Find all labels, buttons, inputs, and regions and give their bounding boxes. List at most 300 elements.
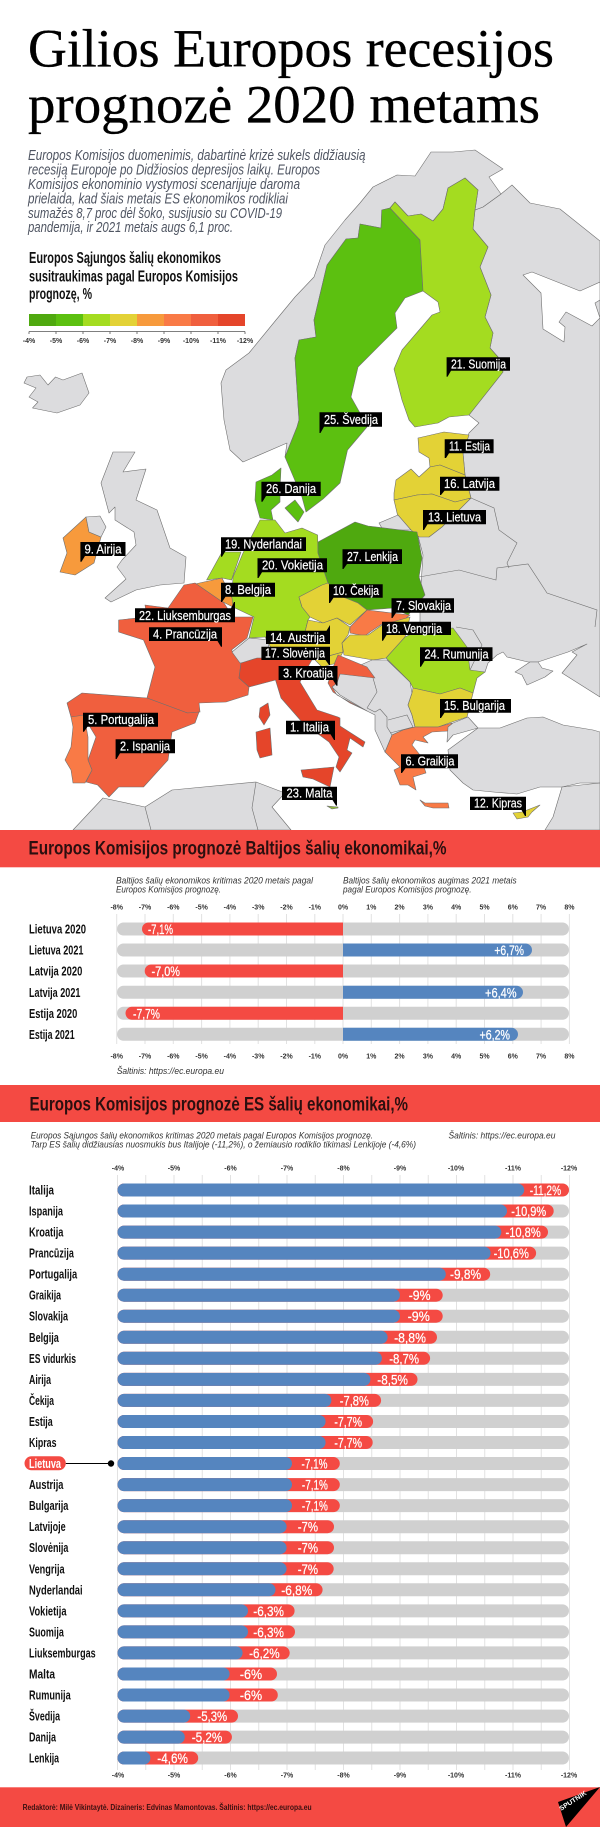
label: Slovenija bbox=[261, 646, 330, 665]
baltic bar chart: 3% bbox=[423, 1054, 434, 1060]
northern ireland bbox=[86, 516, 106, 537]
row: Rumunija: -6% bbox=[240, 1687, 262, 1703]
corsica bbox=[259, 703, 270, 725]
row: Latvija 2020: -7,0% bbox=[152, 963, 180, 979]
netherlands bbox=[207, 552, 241, 580]
row: Italija: Italija bbox=[29, 1182, 55, 1198]
EU chart notes: Šaltinis: https://ec.europa.eu bbox=[448, 1130, 556, 1141]
row: Bulgarija: Bulgarija bbox=[29, 1498, 69, 1513]
baltic bar chart: 2% bbox=[395, 904, 405, 912]
label: Kipras: 12. Kipras bbox=[474, 796, 522, 810]
row: Ispanija: -10,9% bbox=[511, 1203, 546, 1219]
label: Belgija bbox=[221, 583, 275, 602]
iceland bbox=[24, 373, 89, 413]
label: Austrija bbox=[266, 625, 330, 645]
row: Austrija bbox=[29, 1477, 569, 1493]
label: Estija bbox=[445, 439, 494, 458]
croatia bbox=[328, 655, 375, 711]
EU bar chart: -11% bbox=[505, 1772, 522, 1780]
header band: EU forecast: Europos Komisijos prognozė ES šalių ekonomikai,% bbox=[30, 1095, 408, 1116]
row: Suomija: -6,3% bbox=[253, 1624, 284, 1640]
row: Airija: -8,5% bbox=[377, 1371, 408, 1387]
colour legend: -7% bbox=[104, 338, 117, 345]
row: Kroatija bbox=[29, 1224, 569, 1240]
row: Svedija: Švedija bbox=[29, 1709, 61, 1724]
colour legend: -10% bbox=[183, 338, 200, 345]
baltic bar chart: -4% bbox=[224, 904, 237, 912]
title: Gilios Europos recesijos bbox=[28, 19, 554, 79]
row: Lietuva highlighted: Lietuva bbox=[29, 1456, 62, 1471]
balkan border lines bbox=[367, 678, 413, 735]
icon: sputnik logo: SPUTNIK bbox=[558, 1790, 588, 1813]
lithuania bbox=[394, 494, 471, 537]
label: Slovakija: 7. Slovakija bbox=[396, 599, 451, 613]
intro text bbox=[27, 147, 366, 236]
EU bar chart: -11% bbox=[505, 1166, 522, 1172]
baltic bar chart: 8% bbox=[564, 1054, 575, 1060]
row: ES vidurkis: ES vidurkis bbox=[29, 1351, 76, 1366]
row: Malta: Malta bbox=[29, 1666, 56, 1682]
label: Portugalija: 5. Portugalija bbox=[88, 713, 154, 727]
balkans bbox=[332, 660, 415, 752]
baltic bar chart: -2% bbox=[280, 904, 293, 912]
ireland bbox=[60, 517, 101, 575]
EU chart notes bbox=[31, 1130, 556, 1151]
baltic bar chart bbox=[29, 904, 575, 1060]
row: Slovenija: Slovėnija bbox=[29, 1540, 69, 1555]
row: Lietuva 2021 bbox=[29, 942, 569, 958]
EU bar chart: -4% bbox=[112, 1166, 125, 1172]
france bbox=[119, 583, 253, 713]
baltic chart notes: Baltijos šalių ekonomikos augimas 2021 metais bbox=[343, 876, 517, 886]
row: Lietuva 2021: +6,7% bbox=[494, 942, 524, 958]
label: Airija: 9. Airija bbox=[84, 542, 122, 556]
row: Portugalija: Portugalija bbox=[29, 1267, 78, 1282]
row: Estija 2021: Estija 2021 bbox=[29, 1027, 75, 1042]
label: Portugalija bbox=[83, 713, 158, 732]
white sea bbox=[523, 272, 600, 342]
crete bbox=[420, 800, 449, 808]
label: Danija bbox=[261, 482, 321, 502]
title bbox=[28, 19, 554, 135]
row: Slovenija bbox=[29, 1540, 569, 1556]
EU chart notes: Tarp ES šalių didžiausias nuosmukis bus Italijoje (-11,2%), o žemiausio rodiklio tikimasi Lenkijoje (-4,6%) bbox=[31, 1140, 416, 1151]
row: Vengrija bbox=[29, 1561, 569, 1577]
estonia bbox=[418, 432, 469, 475]
intro text: sumažės 8,7 proc dėl šoko, susijusio su COVID-19 bbox=[28, 205, 282, 222]
baltic bar chart: 5% bbox=[479, 904, 490, 912]
zealand bbox=[285, 500, 304, 522]
germany bbox=[232, 520, 328, 638]
colour legend: -6% bbox=[77, 338, 90, 345]
cyprus bbox=[513, 805, 540, 819]
row: Kipras: Kipras bbox=[29, 1435, 56, 1450]
label: Slovakija bbox=[392, 598, 454, 618]
row: Lietuva highlighted: -7,1% bbox=[302, 1456, 328, 1472]
label: Svedija bbox=[320, 412, 382, 433]
label: Kipras bbox=[470, 796, 526, 816]
EU bar chart: -8% bbox=[337, 1166, 350, 1172]
label: Lenkija: 27. Lenkija bbox=[347, 550, 398, 564]
row: Lietuva 2020: -7,1% bbox=[148, 921, 173, 937]
row: Lenkija: Lenkija bbox=[29, 1750, 60, 1766]
intro text: pandemija, ir 2021 metais augs 6,1 proc. bbox=[27, 219, 233, 236]
switzerland bbox=[232, 638, 270, 663]
row: Prancuzija: -10,6% bbox=[494, 1245, 529, 1261]
legend heading: Europos Sąjungos šalių ekonomikos bbox=[29, 250, 221, 267]
portugal bbox=[65, 715, 92, 783]
baltic chart notes: Europos Komisijos prognozę. bbox=[116, 885, 221, 896]
row: Estija 2020 bbox=[29, 1005, 569, 1021]
row: Estija 2020: -7,7% bbox=[133, 1005, 160, 1021]
title: prognozė 2020 metams bbox=[28, 75, 540, 135]
row: Graikija: Graikija bbox=[29, 1288, 62, 1303]
baltic bar chart: 0% bbox=[338, 904, 349, 912]
label: Graikija: 6. Graikija bbox=[406, 754, 455, 768]
row: Graikija bbox=[29, 1287, 569, 1303]
colour legend: -12% bbox=[237, 338, 254, 345]
finland bbox=[390, 178, 503, 427]
row: Estija: Estija bbox=[29, 1414, 53, 1429]
label: Prancuzija bbox=[149, 627, 222, 647]
label: Kroatija: 3. Kroatija bbox=[283, 666, 333, 680]
sardinia bbox=[256, 728, 272, 758]
row: Latvija 2021: Latvija 2021 bbox=[29, 985, 80, 1000]
map labels bbox=[80, 357, 526, 816]
label: Italija bbox=[286, 720, 335, 740]
baltic bar chart: -2% bbox=[280, 1054, 293, 1060]
label: Vokietija: 20. Vokietija bbox=[262, 558, 323, 572]
header band: Baltic forecast bbox=[0, 830, 600, 867]
baltic bar chart: -8% bbox=[110, 904, 124, 912]
baltic bar chart: 2% bbox=[395, 1054, 405, 1060]
baltic bar chart: 1% bbox=[366, 904, 377, 912]
baltic chart notes: Baltijos šalių ekonomikos kritimas 2020 metais pagal bbox=[116, 876, 314, 886]
intro text: prielaida, kad šiais metais ES ekonomikos rodikliai bbox=[27, 190, 289, 208]
row: Bulgarija: -7,1% bbox=[302, 1498, 328, 1514]
colour legend: -9% bbox=[158, 338, 171, 345]
label: Ispanija bbox=[116, 739, 175, 759]
label: Liuksemburgas: 22. Liuksemburgas bbox=[139, 609, 231, 623]
row: Lietuva highlighted bbox=[24, 1456, 569, 1472]
label: Kroatija bbox=[279, 666, 338, 686]
row: Latvija 2020: Latvija 2020 bbox=[29, 964, 82, 978]
row: Cekija: -7,8% bbox=[340, 1392, 369, 1408]
baltic bar chart: -7% bbox=[139, 904, 152, 912]
baltic bar chart: -5% bbox=[195, 1054, 209, 1060]
row: ES vidurkis bbox=[29, 1350, 569, 1366]
map of Europe bbox=[24, 150, 600, 830]
row: Estija: -7,7% bbox=[334, 1414, 362, 1430]
row: Latvija 2020 bbox=[29, 963, 569, 979]
greece bbox=[385, 723, 452, 790]
row: Kipras: -7,7% bbox=[334, 1434, 362, 1450]
row: Slovakija: -9% bbox=[408, 1308, 430, 1324]
legend heading: prognozę, % bbox=[29, 286, 92, 303]
hungary bbox=[342, 617, 410, 660]
row: Estija bbox=[29, 1414, 569, 1430]
footer band: Redaktorė: Milė Vikintaytė. Dizaineris: Edvinas Mamontovas. Šaltinis: https://ec.europa.eu bbox=[23, 1803, 312, 1812]
row: Prancuzija bbox=[29, 1245, 569, 1261]
row: Lenkija bbox=[29, 1750, 569, 1766]
label: Suomija: 21. Suomija bbox=[451, 358, 506, 372]
colour legend bbox=[23, 314, 254, 345]
EU bar chart: -7% bbox=[281, 1772, 294, 1780]
baltic bar chart: -8% bbox=[110, 1054, 124, 1060]
label: Ispanija: 2. Ispanija bbox=[120, 740, 170, 754]
row: Estija 2021 bbox=[29, 1026, 569, 1042]
row: Latvija 2021: +6,4% bbox=[485, 984, 517, 1000]
row: Lietuva 2020: Lietuva 2020 bbox=[29, 922, 86, 936]
row: Vokietija: -6,3% bbox=[253, 1603, 284, 1619]
eastern border lines bbox=[419, 498, 597, 670]
row: Danija: -5,2% bbox=[192, 1729, 222, 1745]
row: Prancuzija: Prancūzija bbox=[29, 1246, 74, 1261]
row: Latvijoje: Latvijoje bbox=[29, 1519, 66, 1534]
row: Danija bbox=[29, 1729, 569, 1745]
row: Suomija: Suomija bbox=[29, 1624, 64, 1639]
EU chart notes: Europos Sąjungos šalių ekonomikos kritimas 2020 metais pagal Europos Komisijos prognozę. bbox=[31, 1130, 373, 1141]
row: Slovenija: -7% bbox=[298, 1540, 318, 1556]
label: Rumunija: 24. Rumunija bbox=[424, 648, 489, 662]
label: Graikija bbox=[401, 754, 458, 773]
row: Slovakija bbox=[29, 1308, 569, 1324]
label: Suomija bbox=[447, 357, 510, 377]
row: Nyderlandai: Nyderlandai bbox=[29, 1582, 83, 1597]
sicily bbox=[301, 767, 334, 787]
baltic bar chart: 7% bbox=[536, 904, 547, 912]
baltic bar chart: -6% bbox=[167, 1054, 180, 1060]
row: Belgija: Belgija bbox=[29, 1330, 59, 1345]
row: Italija bbox=[29, 1182, 569, 1198]
slovenia bbox=[315, 652, 343, 667]
legend heading: susitraukimas pagal Europos Komisijos bbox=[29, 268, 238, 286]
row: ES vidurkis: -8,7% bbox=[389, 1350, 419, 1366]
united kingdom bbox=[101, 452, 186, 602]
norway bbox=[221, 150, 503, 462]
baltic bar chart: 0% bbox=[338, 1054, 349, 1060]
EU bar chart: -5% bbox=[168, 1772, 181, 1780]
turkey bbox=[448, 717, 600, 794]
row: Airija: Airija bbox=[29, 1372, 52, 1387]
row: Lietuva 2020 bbox=[29, 921, 569, 937]
EU bar chart: -6% bbox=[224, 1166, 237, 1172]
label: Lietuva bbox=[423, 510, 486, 530]
legend heading bbox=[29, 250, 238, 303]
baltic bar chart: 7% bbox=[536, 1054, 547, 1060]
baltic bar chart: -1% bbox=[309, 904, 322, 912]
row: Kroatija: Kroatija bbox=[29, 1225, 64, 1240]
colour legend: -8% bbox=[131, 338, 144, 345]
czechia bbox=[299, 583, 367, 625]
icon: sputnik logo bbox=[558, 1787, 600, 1827]
header band: Baltic forecast: Europos Komisijos prognozė Baltijos šalių ekonomikai,% bbox=[28, 838, 447, 859]
label: Svedija: 25. Švedija bbox=[324, 412, 378, 427]
EU bar chart bbox=[24, 1166, 578, 1780]
sweden bbox=[285, 208, 423, 512]
row: Kroatija: -10,8% bbox=[506, 1224, 541, 1240]
row: Estija 2021: +6,2% bbox=[480, 1026, 510, 1042]
baltic bar chart: 6% bbox=[508, 904, 519, 912]
baltic bar chart: -3% bbox=[252, 904, 265, 912]
denmark bbox=[255, 468, 281, 520]
row: Lietuva 2021: Lietuva 2021 bbox=[29, 942, 83, 958]
row: Liuksemburgas: -6,2% bbox=[249, 1645, 280, 1661]
row: Cekija: Čekija bbox=[29, 1393, 54, 1408]
baltic bar chart: 1% bbox=[366, 1054, 377, 1060]
EU bar chart: -4% bbox=[112, 1772, 125, 1780]
row: Belgija bbox=[29, 1329, 569, 1345]
baltic chart source: Šaltinis: https://ec.europa.eu bbox=[117, 1066, 225, 1077]
kaliningrad bbox=[379, 515, 411, 530]
label: Rumunija bbox=[420, 647, 492, 667]
intro text: Komisijos ekonominio vystymosi scenarijuje daroma bbox=[28, 176, 300, 193]
EU bar chart: -12% bbox=[561, 1772, 578, 1780]
label: Vokietija bbox=[258, 558, 327, 578]
row: Rumunija bbox=[29, 1687, 569, 1703]
romania bbox=[386, 628, 485, 694]
baltic bar chart: -1% bbox=[309, 1054, 322, 1060]
row: Estija 2020: Estija 2020 bbox=[29, 1006, 77, 1021]
slovakia bbox=[350, 610, 410, 636]
row: Vengrija: Vengrija bbox=[29, 1561, 65, 1576]
baltic bar chart: 6% bbox=[508, 1054, 519, 1060]
row: Kipras bbox=[29, 1434, 569, 1450]
label: Slovenija: 17. Slovėnija bbox=[265, 646, 325, 660]
baltic bar chart: 3% bbox=[423, 904, 434, 912]
label: Airija bbox=[80, 542, 126, 562]
bulgaria bbox=[408, 688, 473, 727]
row: Danija: Danija bbox=[29, 1730, 57, 1745]
label: Liuksemburgas bbox=[135, 602, 235, 623]
row: Portugalija bbox=[29, 1266, 569, 1282]
row: Ispanija: Ispanija bbox=[29, 1204, 64, 1218]
baltic chart notes: pagal Europos Komisijos prognozę. bbox=[342, 885, 472, 896]
africa border lines bbox=[145, 782, 258, 830]
row: Liuksemburgas: Liuksemburgas bbox=[29, 1645, 96, 1660]
row: Latvijoje: -7% bbox=[298, 1519, 318, 1535]
row: Austrija: Austrija bbox=[29, 1477, 64, 1492]
european turkey bbox=[447, 717, 478, 742]
row: Vokietija bbox=[29, 1603, 569, 1619]
footer band bbox=[0, 1787, 600, 1827]
baltic bar chart: -4% bbox=[224, 1054, 237, 1060]
malta bbox=[327, 806, 338, 809]
row: Austrija: -7,1% bbox=[302, 1477, 328, 1493]
row: Cekija bbox=[29, 1392, 569, 1408]
row: Portugalija: -9,8% bbox=[450, 1266, 481, 1282]
colour legend: -5% bbox=[50, 338, 63, 345]
EU bar chart: -8% bbox=[337, 1772, 350, 1780]
row: Italija: -11,2% bbox=[530, 1182, 561, 1198]
row: Airija bbox=[29, 1371, 569, 1387]
baltic bar chart: -7% bbox=[139, 1054, 152, 1060]
label: Bulgarija: 15. Bulgarija bbox=[444, 699, 505, 713]
label: Lenkija bbox=[342, 549, 402, 569]
label: Prancuzija: 4. Prancūzija bbox=[153, 628, 217, 642]
label: Bulgarija bbox=[440, 699, 511, 718]
header band: EU forecast bbox=[0, 1085, 600, 1122]
italy bbox=[239, 658, 365, 772]
row: Ispanija bbox=[29, 1203, 569, 1219]
spain bbox=[67, 693, 199, 797]
baltic bar chart: 5% bbox=[479, 1054, 490, 1060]
EU bar chart: -10% bbox=[448, 1166, 465, 1172]
EU bar chart: -6% bbox=[224, 1772, 237, 1780]
row: Nyderlandai bbox=[29, 1582, 569, 1598]
label: Lietuva: 13. Lietuva bbox=[428, 510, 481, 524]
row: Lenkija: -4,6% bbox=[157, 1750, 188, 1766]
label: Belgija: 8. Belgija bbox=[225, 583, 271, 597]
label: Vengrija: 18. Vengrija bbox=[386, 622, 442, 636]
gray land: Russia and eastern neighbours bbox=[417, 185, 600, 697]
row: Slovakija: Slovakija bbox=[29, 1309, 69, 1324]
label: Estija: 11. Estija bbox=[449, 440, 490, 454]
poland bbox=[318, 522, 425, 615]
row: Latvija 2021 bbox=[29, 984, 569, 1000]
baltic bar chart: 4% bbox=[451, 904, 462, 912]
row: Malta: -6% bbox=[240, 1666, 262, 1682]
row: Bulgarija bbox=[29, 1498, 569, 1514]
baltic bar chart: -6% bbox=[167, 904, 180, 912]
colour legend: -4% bbox=[23, 338, 36, 345]
label: Danija: 26. Danija bbox=[266, 482, 316, 496]
colour legend: -11% bbox=[210, 338, 227, 345]
row: Latvijoje bbox=[29, 1519, 569, 1535]
row: Nyderlandai: -6,8% bbox=[281, 1582, 312, 1598]
label: Vengrija bbox=[382, 622, 451, 641]
row: Belgija: -8,8% bbox=[394, 1329, 426, 1345]
label: Cekija: 10. Čekija bbox=[333, 583, 379, 598]
row: Liuksemburgas bbox=[29, 1645, 569, 1661]
row: Vengrija: -7% bbox=[298, 1561, 318, 1577]
north africa bbox=[73, 782, 291, 830]
label: Austrija: 14. Austrija bbox=[270, 631, 325, 645]
EU bar chart: -7% bbox=[281, 1166, 294, 1172]
baltic bar chart: 4% bbox=[451, 1054, 462, 1060]
row: Malta bbox=[29, 1666, 569, 1682]
middle east bbox=[545, 783, 600, 830]
EU bar chart: -5% bbox=[168, 1166, 181, 1172]
label: Malta: 23. Malta bbox=[286, 786, 333, 800]
label: Cekija bbox=[329, 583, 383, 603]
label: Latvija: 16. Latvija bbox=[444, 477, 495, 491]
baltic bar chart: -3% bbox=[252, 1054, 265, 1060]
EU bar chart: -9% bbox=[394, 1772, 407, 1780]
row: Svedija: -5,3% bbox=[197, 1708, 227, 1724]
crimea bbox=[515, 662, 553, 685]
EU bar chart: -10% bbox=[448, 1772, 465, 1780]
intro text: recesiją Europoje po Didžiosios depresijos laikų. Europos bbox=[28, 162, 320, 178]
latvia bbox=[394, 465, 471, 502]
austria bbox=[265, 618, 350, 660]
intro text: Europos Komisijos duomenimis, dabartinė krizė sukels didžiausią bbox=[28, 147, 366, 164]
row: Suomija bbox=[29, 1624, 569, 1640]
label: Nyderlandai bbox=[221, 537, 306, 557]
baltic bar chart: -5% bbox=[195, 904, 209, 912]
EU bar chart: -12% bbox=[561, 1166, 578, 1172]
label: Latvija bbox=[440, 477, 499, 495]
baltic chart notes bbox=[116, 876, 517, 896]
label: Nyderlandai: 19. Nyderlandai bbox=[225, 538, 302, 552]
EU bar chart: -9% bbox=[394, 1166, 407, 1172]
label: Malta bbox=[282, 786, 337, 806]
row: Rumunija: Rumunija bbox=[29, 1688, 71, 1702]
row: Svedija bbox=[29, 1708, 569, 1724]
row: Vokietija: Vokietija bbox=[29, 1603, 67, 1618]
label: Italija: 1. Italija bbox=[290, 720, 329, 734]
row: Graikija: -9% bbox=[409, 1287, 430, 1303]
